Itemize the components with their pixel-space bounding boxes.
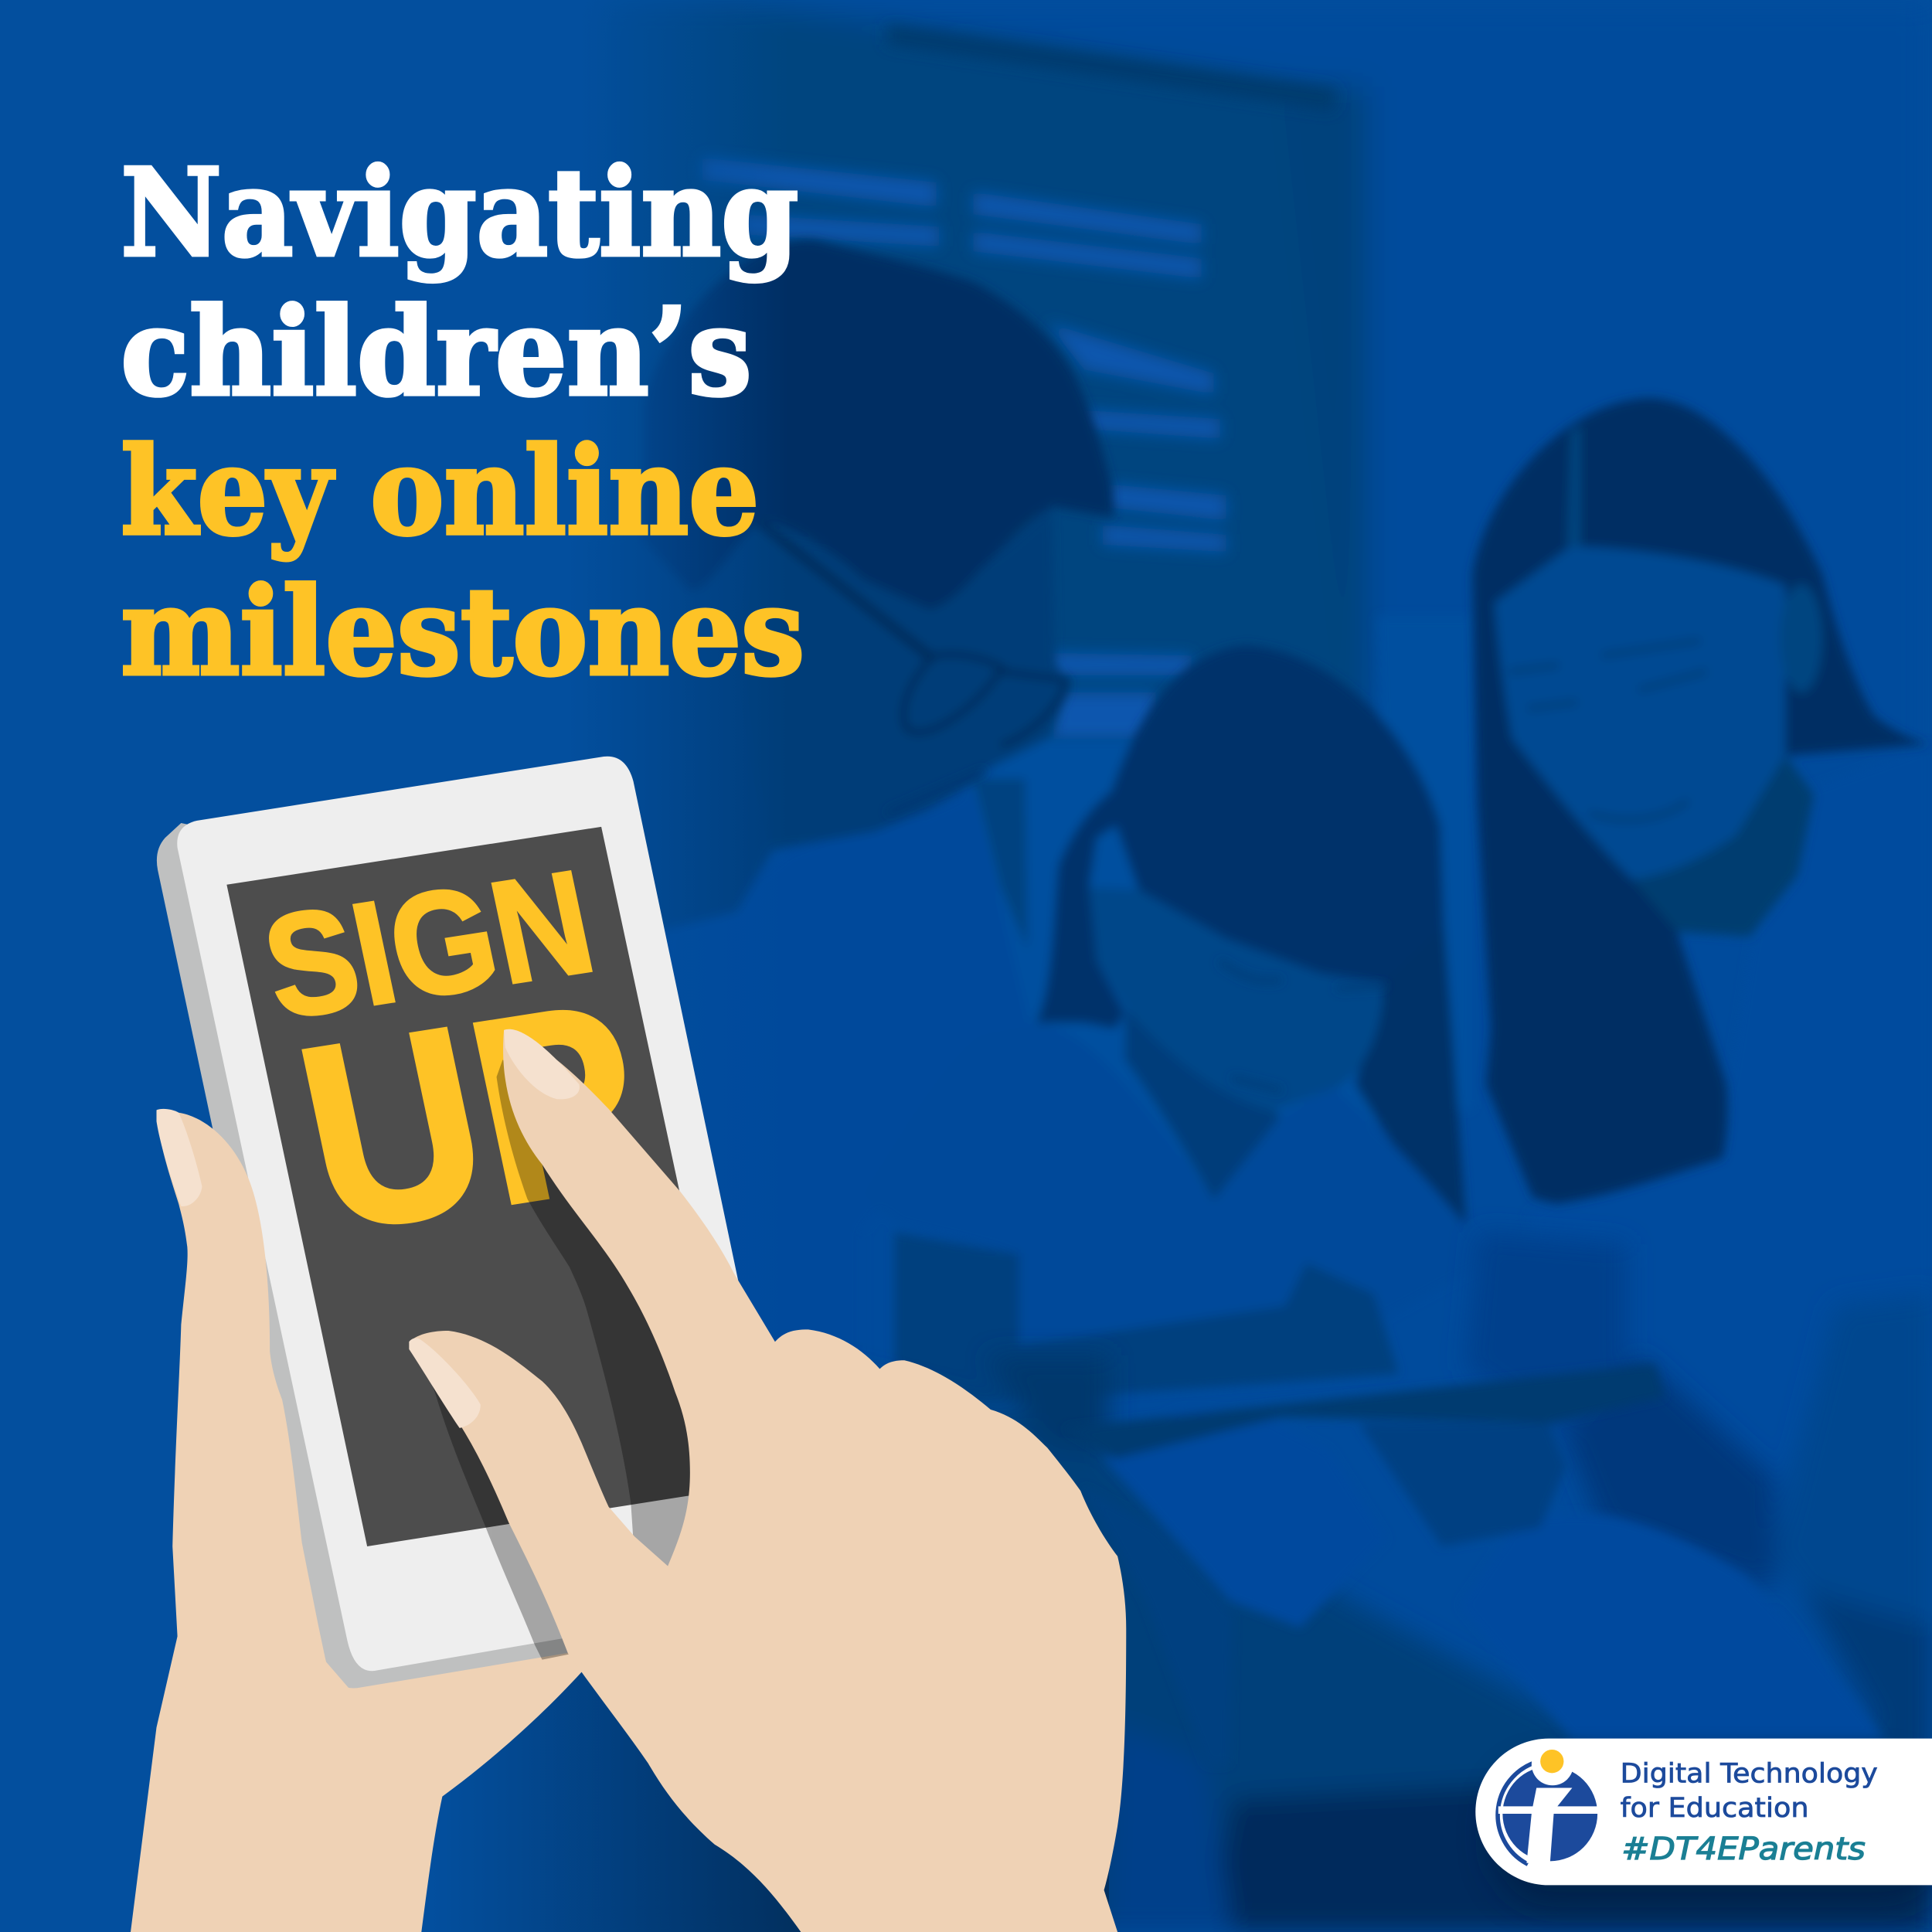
glasses <box>758 521 1067 746</box>
illustration: hands holding phone <box>131 757 1126 1932</box>
finger shadows <box>425 1060 702 1660</box>
holding hand finger <box>156 1109 349 1688</box>
man face <box>740 506 1070 850</box>
woman neck <box>1633 755 1814 937</box>
thumb shadow <box>425 1368 573 1660</box>
nails <box>156 1029 580 1428</box>
title <box>121 141 804 702</box>
index finger shadow <box>497 1060 702 1571</box>
lower body masses <box>788 1232 1932 1932</box>
woman face <box>1495 546 1785 879</box>
man hair <box>643 240 1114 610</box>
title line 4: milestones <box>121 560 804 702</box>
girl face <box>1089 887 1383 1111</box>
sign label: SIGN <box>251 840 607 1050</box>
girl dress <box>859 1022 1493 1345</box>
title line 3: key online <box>121 420 759 562</box>
hashtag: #DT4EParents <box>1621 1832 1866 1867</box>
woman shirt <box>1528 744 1932 1528</box>
phone body <box>177 757 804 1671</box>
title line 1: Navigating <box>121 141 798 284</box>
tablet <box>1063 1364 1665 1459</box>
curtain panels <box>961 740 1378 1232</box>
phone side <box>157 823 641 1689</box>
letter i <box>1498 1787 1602 1863</box>
nail: thumb <box>409 1338 481 1428</box>
back hand palm <box>131 1314 641 1932</box>
logo shadow <box>1491 1762 1932 1907</box>
phone <box>157 757 804 1689</box>
girl arms <box>895 1232 1399 1417</box>
name line 2: for Education <box>1621 1792 1809 1824</box>
girl right hair <box>1355 924 1466 1225</box>
logo text <box>1621 1757 1878 1867</box>
man shirt <box>641 788 1029 1368</box>
name line 1: Digital Technology <box>1621 1757 1878 1789</box>
face details <box>887 641 1706 1090</box>
woman ear <box>1781 584 1822 692</box>
yellow dot <box>1540 1750 1563 1773</box>
logo pill <box>1475 1739 1932 1885</box>
girl hand <box>1359 1423 1566 1546</box>
white dot halo <box>1532 1743 1573 1785</box>
sign up text <box>251 840 665 1286</box>
logo mark <box>1498 1743 1602 1864</box>
curtain strap <box>974 779 1028 949</box>
pill background <box>1475 1739 1932 1885</box>
girl hair <box>1036 645 1444 1029</box>
woman hair <box>1472 398 1930 1204</box>
nail: index <box>504 1029 580 1099</box>
blue circle <box>1502 1767 1597 1861</box>
up label: UP <box>278 947 665 1286</box>
nail: holding finger <box>156 1109 202 1206</box>
pointing hand <box>409 1030 1126 1932</box>
left knee <box>1105 1410 1386 1628</box>
outer arc <box>1498 1760 1542 1864</box>
woman part highlight <box>1567 425 1581 546</box>
phone screen <box>226 827 743 1546</box>
man arm <box>1082 1486 1232 1764</box>
title line 2: children’s <box>121 281 752 423</box>
girl neck shadow <box>1125 1010 1281 1200</box>
man neck shadow <box>530 518 838 930</box>
right knee <box>1460 1515 1885 1739</box>
window frame and blinds <box>702 25 1337 740</box>
